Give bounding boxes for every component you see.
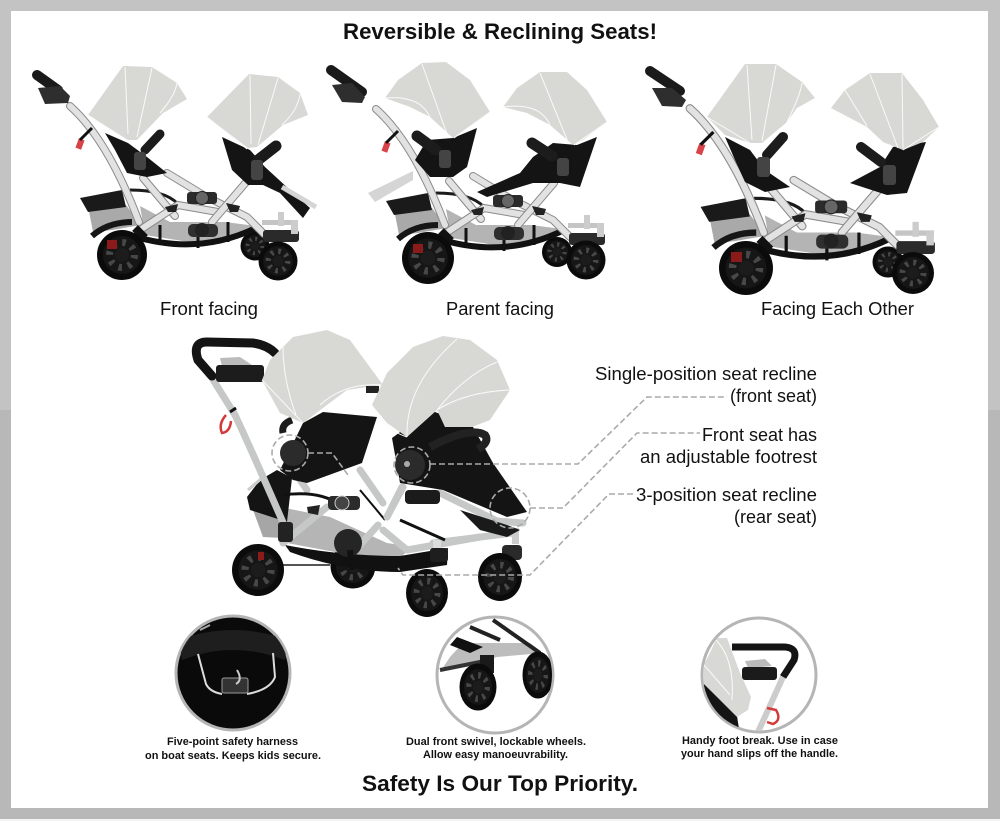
label: 3-position seat recline: 3-position seat recline xyxy=(636,485,817,505)
label: adjustable footrest xyxy=(640,425,817,467)
caption: front facing: Front facing xyxy=(160,299,258,319)
label: 3-position seat recline xyxy=(636,485,817,527)
footer heading: Safety Is Our Top Priority. xyxy=(362,771,638,796)
label: 3-position seat recline: (rear seat) xyxy=(734,507,817,527)
rear hidden wheel xyxy=(330,544,376,588)
caption: foot brake: Handy foot break. Use in case xyxy=(682,735,838,747)
caption: swivel wheels: Allow easy manoeuvrability. xyxy=(423,749,568,761)
caption: harness xyxy=(145,736,321,762)
rear wheel xyxy=(232,544,284,596)
caption: facing each other: Facing Each Other xyxy=(761,299,914,319)
label: single-position seat recline: Single-position seat recline xyxy=(595,364,817,384)
title: Reversible & Reclining Seats! xyxy=(343,19,657,44)
basket and tray xyxy=(247,470,448,572)
caption: harness: Five-point safety harness xyxy=(167,736,298,748)
frame xyxy=(212,378,519,565)
detail circle: foot brake xyxy=(700,618,816,735)
center hubs xyxy=(307,496,362,570)
detail circle: harness xyxy=(176,616,290,730)
label: single-position seat recline xyxy=(595,364,817,406)
detail circle: swivel wheels xyxy=(437,617,554,733)
caption: harness: on boat seats. Keeps kids secure. xyxy=(145,750,321,762)
front seat xyxy=(372,336,527,537)
caption: swivel wheels xyxy=(406,736,586,761)
caption: swivel wheels: Dual front swivel, lockable wheels. xyxy=(406,736,586,748)
leader: single-position seat recline xyxy=(272,397,727,483)
caption: parent facing: Parent facing xyxy=(446,299,554,319)
label: single-position seat recline: (front seat) xyxy=(730,386,817,406)
leader: adjustable footrest xyxy=(490,433,700,528)
stroller: front facing xyxy=(37,66,316,280)
caption: foot brake: your hand slips off the handle. xyxy=(681,748,838,760)
main stroller xyxy=(196,330,527,617)
caption: foot brake xyxy=(681,735,838,760)
front wheels xyxy=(502,545,522,560)
stroller: parent facing xyxy=(331,62,607,284)
leader: 3-position seat recline xyxy=(398,494,633,575)
rear seat xyxy=(262,330,383,483)
stroller: facing each other xyxy=(650,64,939,295)
handle and console xyxy=(196,342,275,433)
label: adjustable footrest: an adjustable footrest xyxy=(640,447,817,467)
label: adjustable footrest: Front seat has xyxy=(702,425,817,445)
